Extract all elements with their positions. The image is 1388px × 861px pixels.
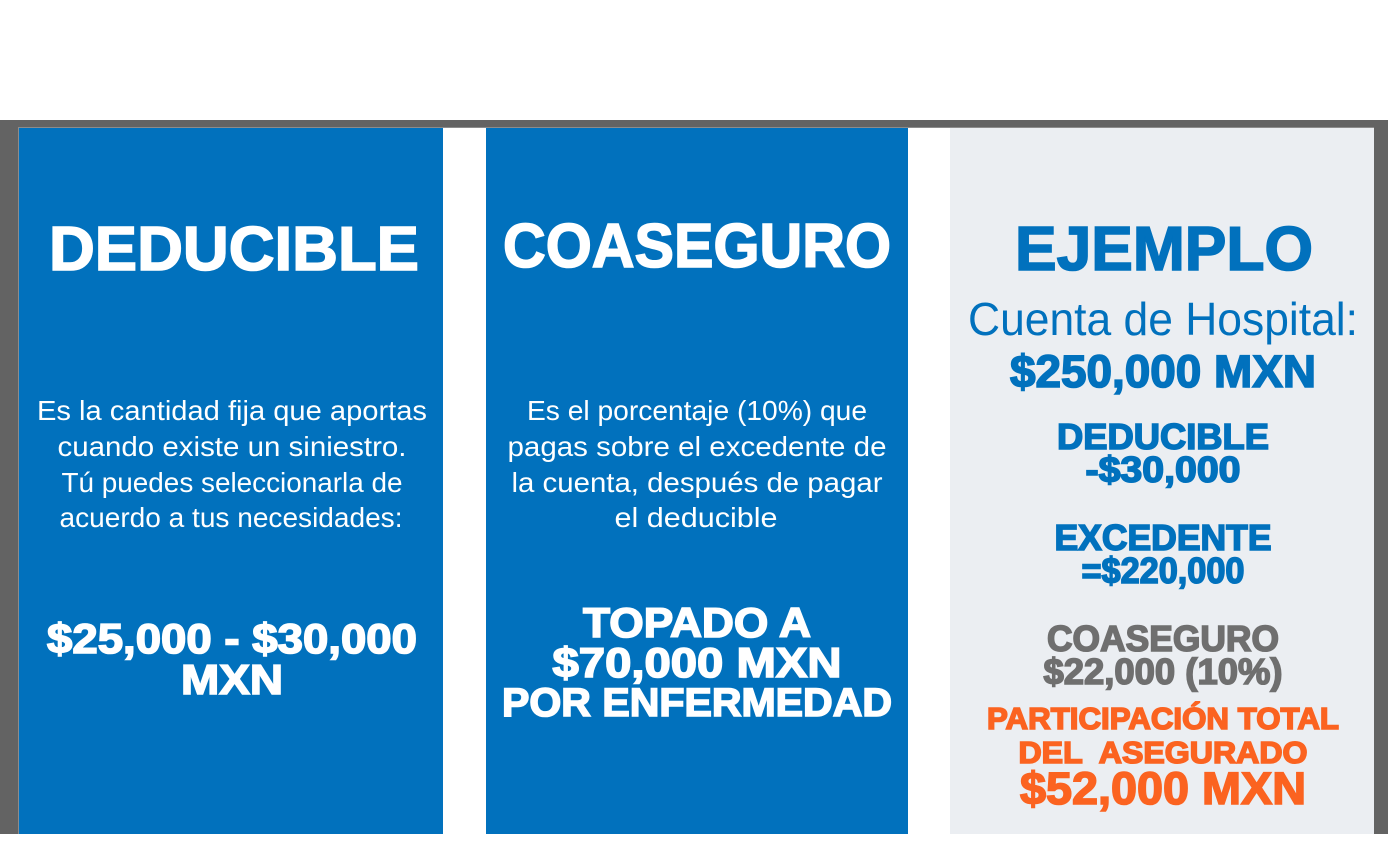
heading: ejemplo: EJEMPLO	[1015, 215, 1313, 284]
text block: deducible description: cuando existe un siniestro.	[58, 431, 406, 462]
hospital bill: Cuenta de Hospital:	[968, 293, 1358, 345]
text block: deducible description: Tú puedes seleccionarla de	[62, 467, 402, 498]
amount: coaseguro cap: TOPADO A	[583, 599, 811, 646]
amount: coaseguro cap: $70,000 MXN	[552, 639, 842, 686]
coaseguro line: COASEGURO	[1047, 618, 1279, 659]
amount: coaseguro cap: POR ENFERMEDAD	[502, 681, 892, 725]
text block: coaseguro description: el deducible	[614, 502, 778, 533]
text block: deducible description	[37, 395, 427, 533]
excedente line	[1054, 517, 1272, 591]
text block: coaseguro description: pagas sobre el excedente de	[508, 431, 886, 462]
amount: coaseguro cap	[502, 599, 892, 725]
hospital bill: $250,000 MXN	[1010, 346, 1316, 397]
total participation: DEL ASEGURADO	[1018, 735, 1308, 770]
panel: coaseguro	[486, 128, 908, 834]
panel: ejemplo	[950, 128, 1374, 834]
deducible line: DEDUCIBLE	[1057, 416, 1269, 457]
hospital bill	[968, 293, 1358, 397]
amount: deducible range: MXN	[181, 656, 283, 703]
excedente line: EXCEDENTE	[1054, 517, 1272, 558]
total participation: PARTICIPACIÓN TOTAL	[987, 700, 1339, 736]
text block: coaseguro description: la cuenta, después de pagar	[512, 467, 882, 498]
amount: deducible range	[47, 615, 417, 703]
panel: deducible	[19, 128, 443, 834]
coaseguro line	[1044, 618, 1282, 692]
amount: deducible range: $25,000 - $30,000	[47, 615, 417, 662]
total participation: $52,000 MXN	[1020, 763, 1306, 814]
excedente line: =$220,000	[1082, 550, 1244, 591]
coaseguro line: $22,000 (10%)	[1044, 651, 1282, 692]
total participation	[987, 700, 1339, 814]
text block: deducible description: acuerdo a tus necesidades:	[60, 502, 402, 533]
deducible line: -$30,000	[1086, 449, 1240, 490]
heading: deducible: DEDUCIBLE	[49, 215, 419, 284]
heading: coaseguro: COASEGURO	[503, 212, 891, 281]
text block: coaseguro description	[508, 395, 886, 533]
text block: deducible description: Es la cantidad fija que aportas	[37, 395, 427, 426]
deducible line	[1057, 416, 1269, 490]
text block: coaseguro description: Es el porcentaje (10%) que	[527, 395, 867, 426]
